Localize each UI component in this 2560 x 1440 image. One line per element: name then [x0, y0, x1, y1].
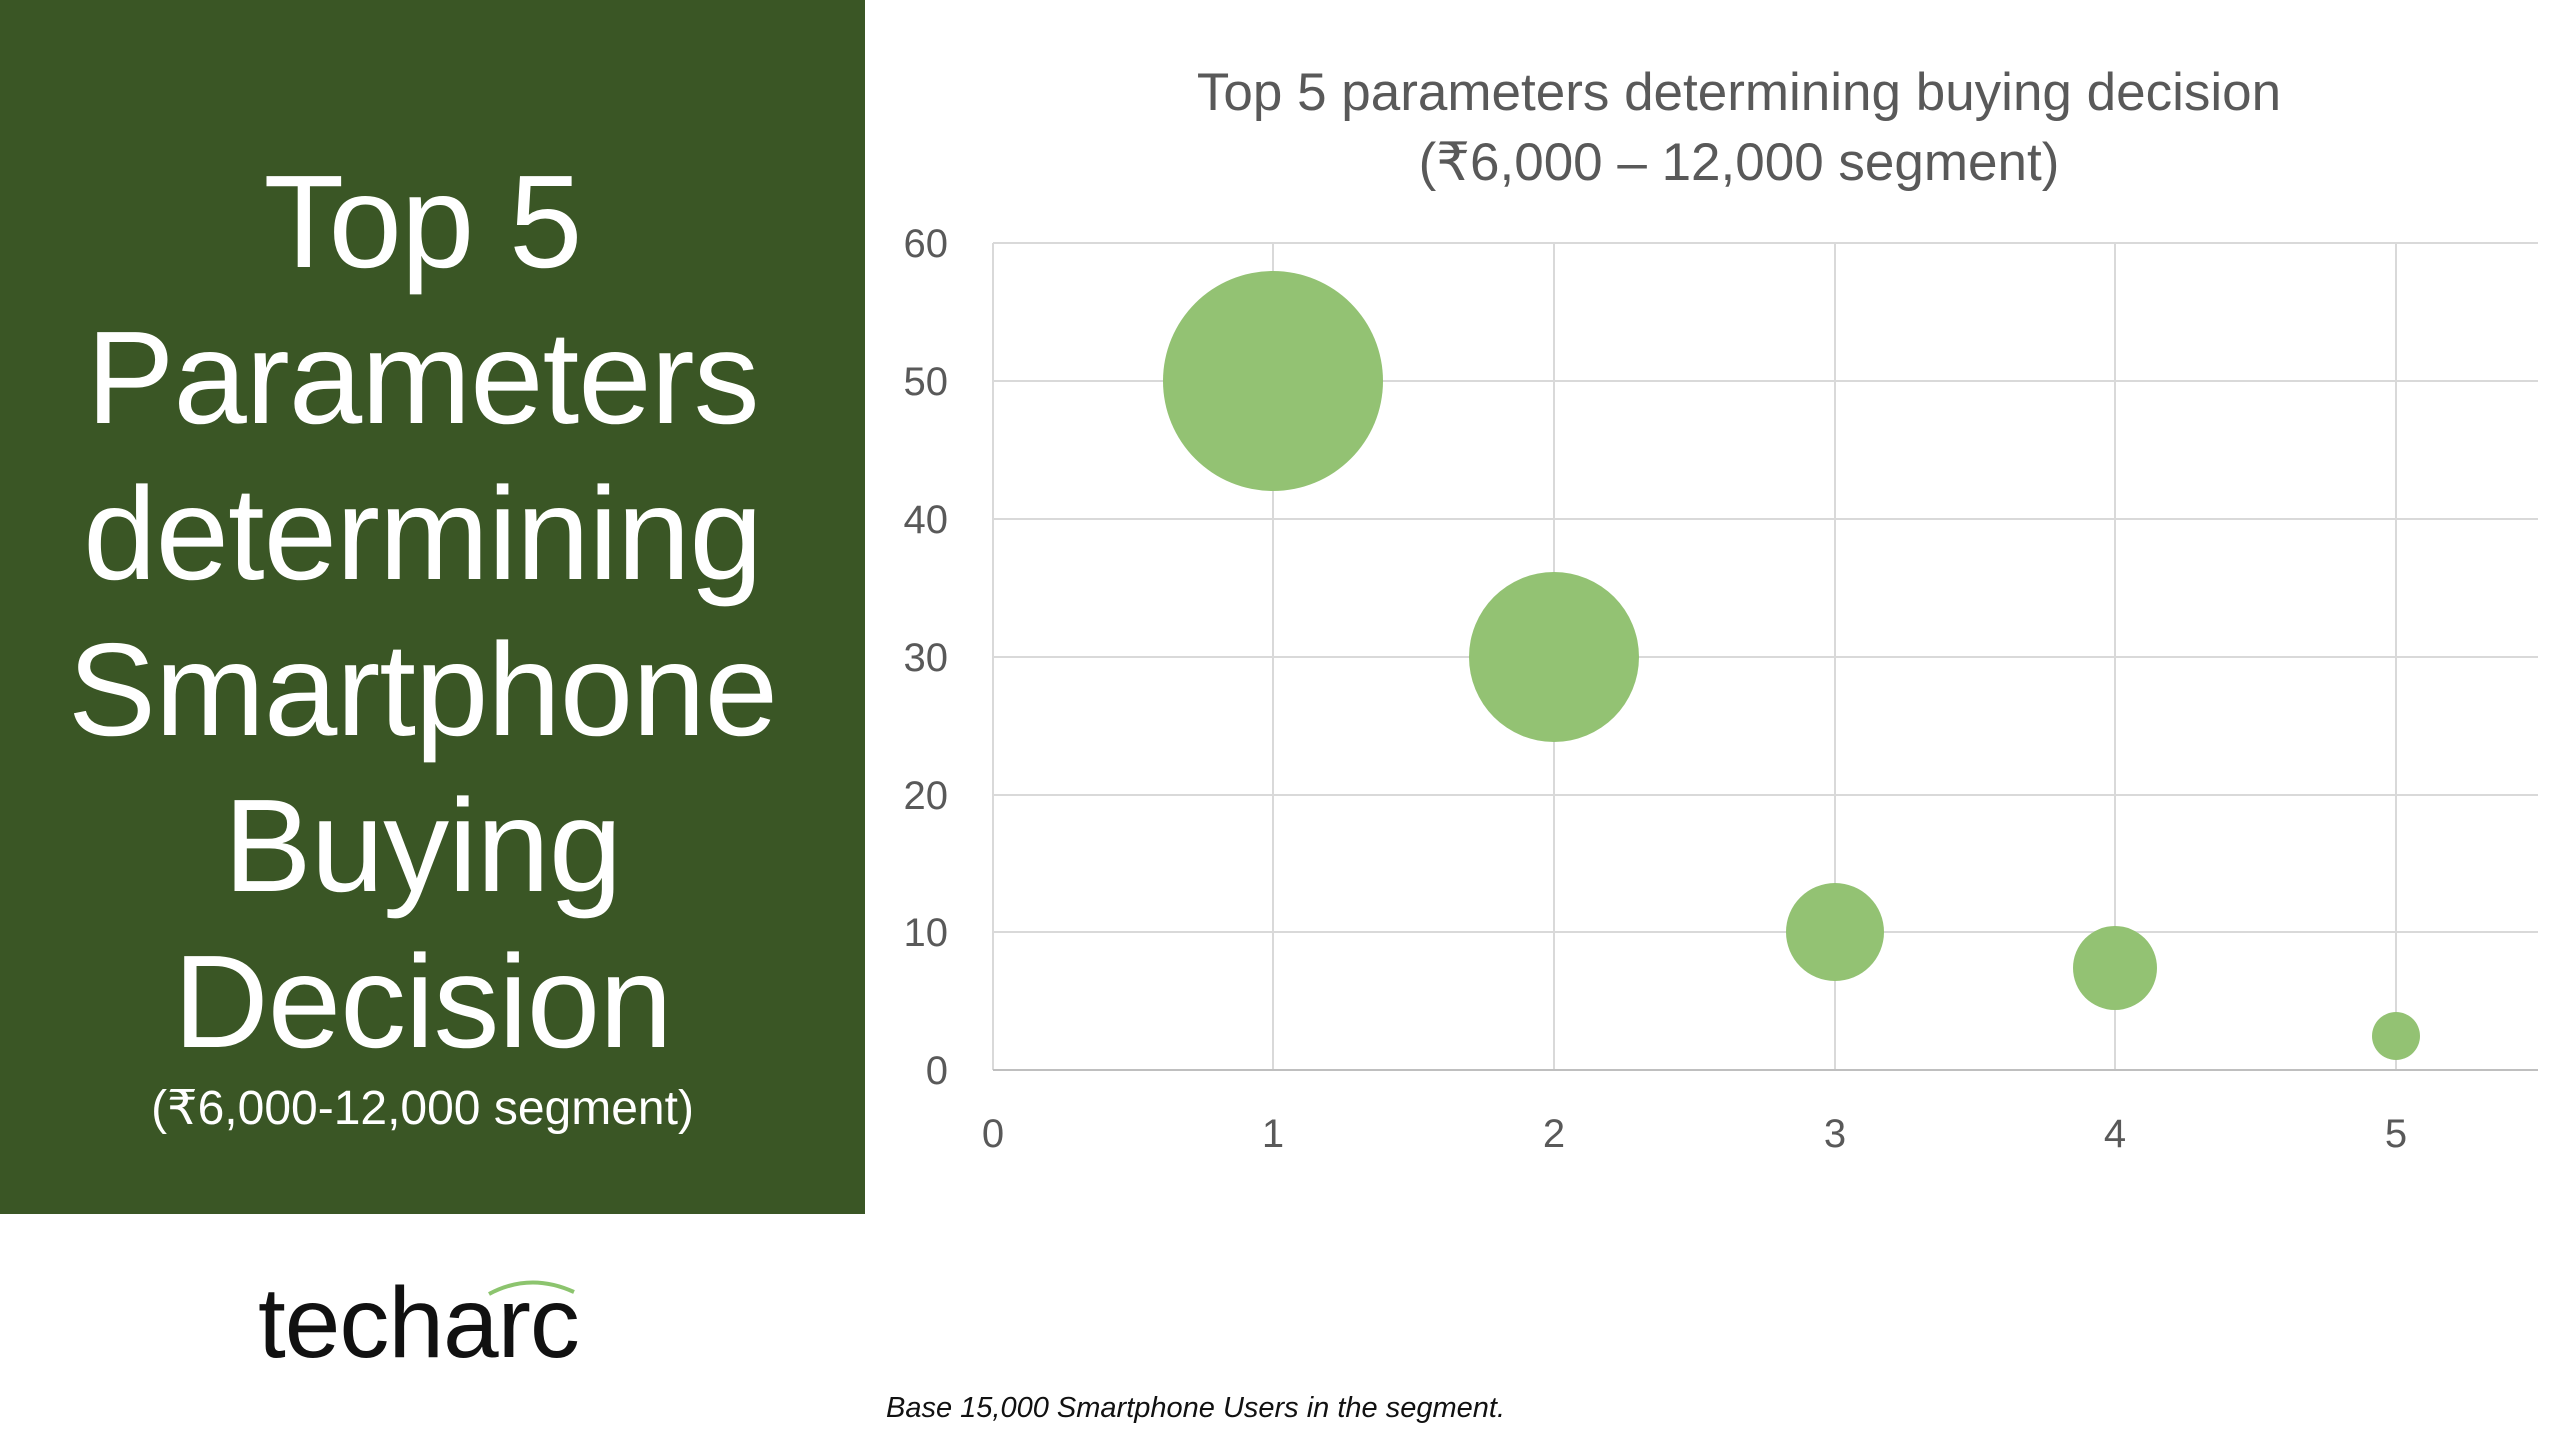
y axis labels: 10	[904, 911, 948, 955]
heading	[68, 148, 777, 1075]
x axis labels: 2	[1543, 1112, 1565, 1156]
heading: Buying	[224, 772, 621, 919]
heading: Smartphone	[68, 616, 777, 763]
x axis labels: 5	[2385, 1112, 2407, 1156]
subtitle: (₹6,000-12,000 segment)	[151, 1082, 694, 1135]
x axis labels	[982, 1112, 2407, 1156]
x axis labels: 1	[1262, 1112, 1284, 1156]
chart title	[1197, 63, 2281, 192]
panel: title block	[0, 0, 865, 1214]
y axis labels	[904, 222, 948, 1093]
y axis labels: 20	[904, 774, 948, 818]
heading: determining	[83, 460, 762, 607]
x axis labels: 4	[2104, 1112, 2126, 1156]
heading: Top 5	[264, 148, 581, 295]
logo: techarc: techarc	[258, 1267, 579, 1379]
heading: Parameters	[86, 304, 759, 451]
y axis labels: 0	[926, 1049, 948, 1093]
y axis labels: 60	[904, 222, 948, 266]
x axis labels: 3	[1824, 1112, 1846, 1156]
bubbles	[1163, 271, 2420, 1060]
footnote: Base 15,000 Smartphone Users in the segment.	[886, 1392, 1505, 1424]
chart title: Top 5 parameters determining buying decision	[1197, 63, 2281, 122]
y axis labels: 40	[904, 498, 948, 542]
heading: Decision	[173, 928, 672, 1075]
y axis labels: 50	[904, 360, 948, 404]
y axis labels: 30	[904, 636, 948, 680]
x axis labels: 0	[982, 1112, 1004, 1156]
chart title: (₹6,000 – 12,000 segment)	[1419, 133, 2059, 192]
